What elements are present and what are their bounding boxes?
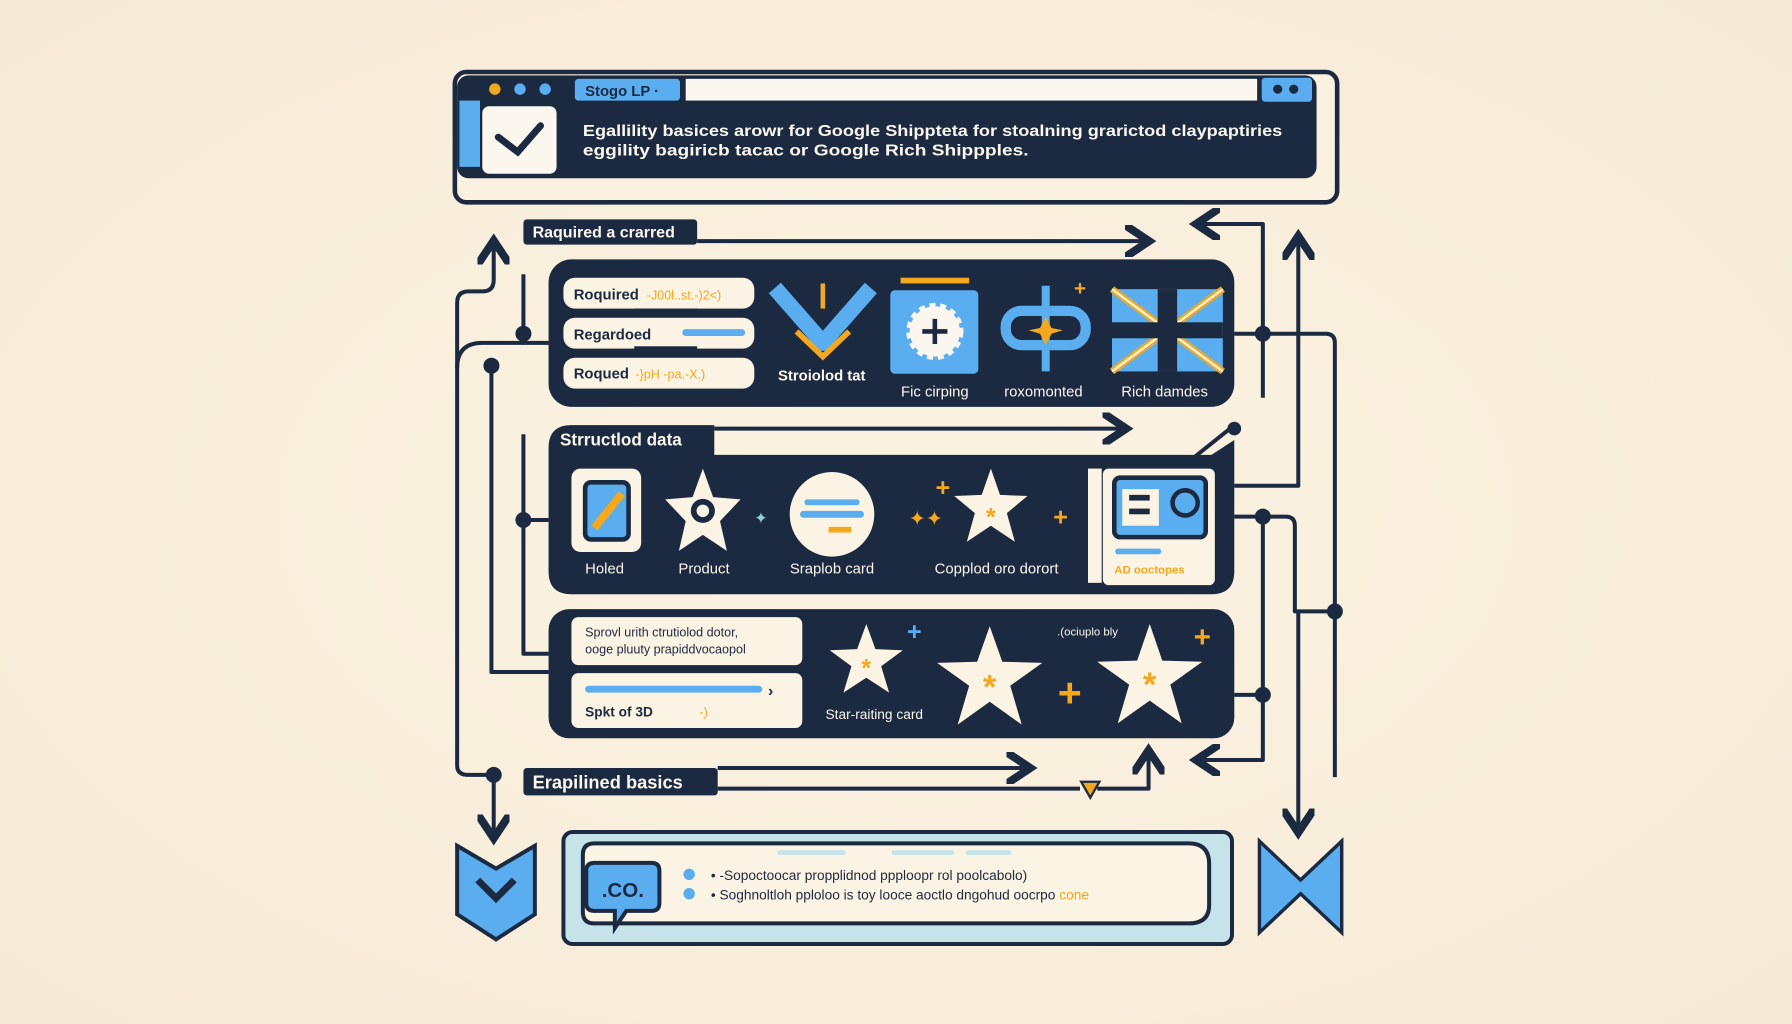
label: basics: Erapilined basics bbox=[533, 772, 683, 793]
panel: star ratings: -) bbox=[699, 706, 708, 720]
panel: requirements: Regardoed bbox=[574, 327, 651, 343]
icon: chevron bbox=[775, 283, 871, 385]
icon: hotel bbox=[571, 469, 641, 578]
icon: crosshair bbox=[1004, 277, 1086, 401]
icon: stars bbox=[830, 618, 1211, 725]
label: required bbox=[523, 219, 1145, 245]
header text: Egallility basices arowr for Google Shippteta for stoalning grarictod claypaptiries bbox=[583, 123, 1282, 140]
card: AD ooctopes bbox=[1114, 565, 1185, 577]
panel: requirements: -}pH -pa.-X.) bbox=[635, 367, 705, 381]
panel: star ratings bbox=[549, 609, 1234, 738]
icon: stars: .(ociuplo bly bbox=[1057, 626, 1118, 638]
panel: star ratings: › bbox=[768, 683, 773, 700]
icon: sparkle star bbox=[754, 469, 1068, 578]
panel: star ratings: Sprovl urith ctrutiolod dotor, bbox=[585, 626, 738, 640]
icon: sparkle star: ✦ bbox=[754, 510, 768, 527]
callout: bottom panel bbox=[563, 832, 1232, 944]
panel: structured data bbox=[549, 425, 1234, 594]
icon: stars: * bbox=[861, 655, 871, 683]
icon: stars: * bbox=[983, 668, 997, 706]
connector lines bbox=[457, 224, 1335, 834]
icon: crosshair: roxomonted bbox=[1004, 385, 1083, 401]
icon: left shield chevron bbox=[457, 846, 535, 939]
icon: right bowtie bbox=[1259, 841, 1342, 933]
icon: flag: Rich damdes bbox=[1121, 385, 1208, 401]
header text bbox=[583, 123, 1282, 159]
icon: snippet circle: Sraplob card bbox=[790, 562, 874, 578]
icon: product star bbox=[665, 469, 741, 578]
card bbox=[1088, 469, 1215, 585]
icon: gear box bbox=[890, 278, 978, 401]
panel: requirements: Roqued bbox=[574, 366, 629, 382]
label: required: Raquired a crarred bbox=[533, 225, 675, 242]
callout: bottom panel: • -Sopoctoocar propplidnod ppploopr rol poolcabolo) bbox=[711, 868, 1027, 883]
label: basics bbox=[523, 768, 1099, 798]
icon: sparkle star: * bbox=[986, 504, 996, 532]
header text: eggility bagiricb tacac or Google Rich Shippples. bbox=[583, 142, 1029, 159]
icon: sparkle star: ✦✦ bbox=[909, 508, 943, 531]
panel: requirements: -J00l..st.-)2<) bbox=[647, 288, 721, 302]
icon: stars: + bbox=[907, 618, 922, 646]
panel: star ratings: ooge pluuty prapiddvocaopol bbox=[585, 643, 746, 657]
icon: stars: + bbox=[1058, 669, 1082, 715]
icon: stars: + bbox=[1194, 621, 1211, 654]
icon: checkbox bbox=[482, 106, 557, 174]
browser frame bbox=[455, 72, 1337, 202]
panel: requirements: Roquired bbox=[574, 287, 639, 303]
icon: flag bbox=[1112, 289, 1223, 401]
icon: sparkle star: + bbox=[1053, 504, 1068, 532]
icon: sparkle star: Copplod oro dorort bbox=[935, 562, 1059, 578]
icon: gear box: Fic cirping bbox=[901, 385, 969, 401]
icon: chevron: Stroiolod tat bbox=[778, 369, 865, 385]
icon: .co bubble bbox=[586, 863, 659, 928]
panel: star ratings: Star-raiting card bbox=[826, 707, 923, 722]
icon: product star: Product bbox=[678, 562, 730, 578]
icon: stars: * bbox=[1143, 666, 1157, 704]
panel: star ratings: Spkt of 3D bbox=[585, 705, 653, 720]
tab: Stogo LP · bbox=[585, 84, 659, 100]
icon: .co bubble: .CO. bbox=[602, 879, 644, 902]
panel: structured data: Strructlod data bbox=[560, 430, 682, 450]
tab bbox=[575, 79, 680, 101]
icon: sparkle star: + bbox=[936, 474, 950, 502]
panel: requirements bbox=[549, 259, 1234, 407]
callout: bottom panel: • Soghnoltloh pploloo is toy looce aoctlo dngohud oocrpo cone bbox=[711, 887, 1089, 902]
icon: crosshair: + bbox=[1074, 277, 1086, 300]
icon: snippet circle bbox=[790, 472, 874, 578]
icon: hotel: Holed bbox=[585, 562, 624, 578]
